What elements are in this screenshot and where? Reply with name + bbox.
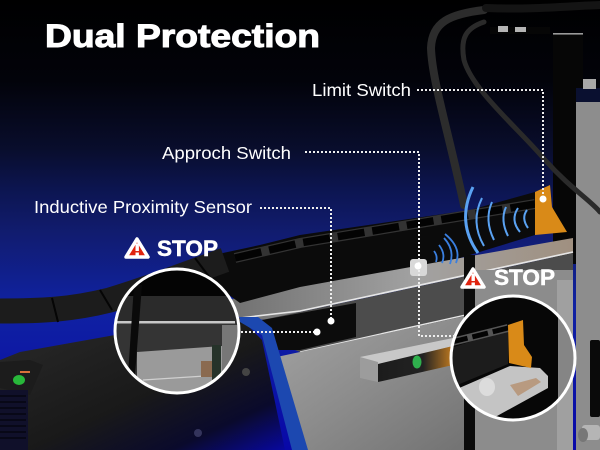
stop warning left: STOP	[157, 236, 218, 261]
laser head black box	[0, 318, 285, 450]
wave arcs left group	[434, 234, 458, 264]
main silver panel	[272, 315, 470, 450]
white edge lines	[240, 252, 573, 352]
spiral hose	[0, 258, 225, 322]
screw	[578, 425, 600, 442]
small top sensors	[498, 26, 526, 32]
label: inductive proximity sensor: Inductive Proximity Sensor	[34, 197, 252, 217]
right panel slot	[590, 340, 600, 417]
stop warning left	[126, 236, 218, 261]
drag chain	[195, 192, 535, 303]
right black bracket	[490, 27, 583, 264]
rail sensor	[360, 338, 453, 382]
label: limit switch: Limit Switch	[312, 80, 411, 100]
leader line: inductive sensor	[260, 208, 334, 324]
icon: warning triangle	[462, 269, 484, 287]
right silver column	[576, 79, 600, 450]
leader line: limit switch	[417, 90, 546, 202]
cables	[431, 5, 600, 212]
stop warning right	[462, 265, 555, 290]
orange flag	[535, 185, 567, 235]
leader line: approach switch	[305, 152, 455, 336]
icon: warning triangle	[126, 239, 148, 257]
callout circle: inductive sensor	[114, 268, 240, 394]
green indicator	[412, 356, 422, 368]
leader line: circle to sensor	[241, 328, 320, 336]
silver strip under chain	[228, 238, 573, 320]
wave arcs right group	[466, 187, 528, 253]
callout circle: limit switch	[450, 296, 578, 420]
lower gray panel right	[475, 270, 573, 450]
approach switch target nut	[410, 259, 427, 276]
stop warning right: STOP	[494, 265, 555, 290]
label: approach switch: Approch Switch	[162, 143, 291, 163]
black vertical strip	[464, 255, 475, 450]
dark slot	[262, 253, 573, 352]
blue bracket	[240, 317, 308, 450]
title: Dual Protection	[45, 18, 320, 54]
